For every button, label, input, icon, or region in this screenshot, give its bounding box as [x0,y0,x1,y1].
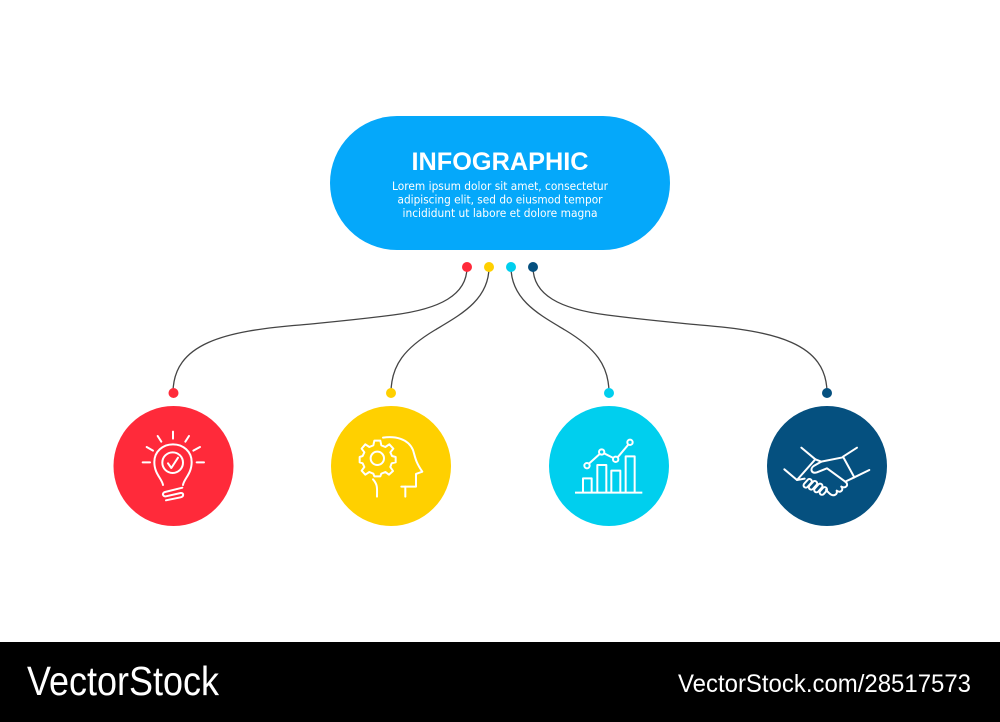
icon: head with gear [360,437,422,497]
circle: cyan chart [549,406,669,526]
circle: navy handshake [767,406,887,526]
text block: description: adipiscing elit, sed do eiusmod tempor [398,192,603,206]
footer bar [0,642,1000,722]
circle: yellow head [331,406,451,526]
connector: red [168,262,472,398]
icon: lightbulb with check [143,432,204,500]
icon: bar and line chart [575,440,642,493]
text block: description: Lorem ipsum dolor sit amet, consectetur [392,179,608,193]
text: url: VectorStock.com/28517573 [678,670,971,698]
text block: description [392,179,608,220]
connector: yellow [386,262,494,398]
connector: navy [528,262,832,398]
text: brand: VectorStock [27,658,219,704]
connector: cyan [506,262,614,398]
panel: central infographic pill [330,116,670,250]
text block: description: incididunt ut labore et dolore magna [402,206,598,220]
title: INFOGRAPHIC [412,148,588,176]
icon: handshake [784,448,869,496]
circle: red lightbulb [114,406,234,526]
